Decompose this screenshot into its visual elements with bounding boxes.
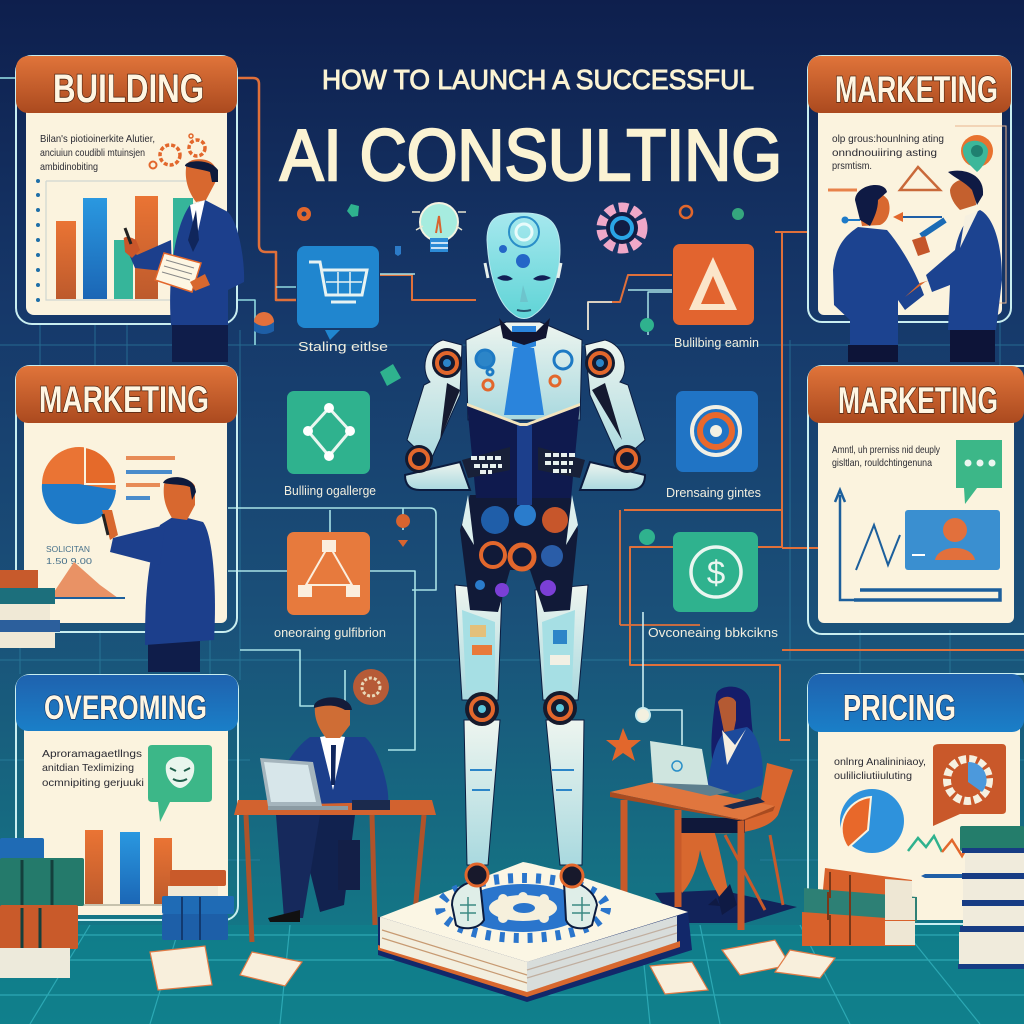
line chart — [835, 490, 1000, 600]
pie chart — [42, 447, 116, 524]
icon: gears — [150, 134, 205, 168]
panel paper — [24, 410, 227, 623]
panel paper — [818, 100, 1002, 315]
body text: Amntl, uh prerniss nid deuply — [832, 444, 941, 456]
robot head — [485, 213, 561, 318]
books: right small stack — [802, 868, 917, 946]
app tile: triangle — [673, 244, 759, 350]
robot hands — [462, 447, 585, 478]
body text: ambidinobiting — [40, 161, 98, 173]
panel: marketing right — [808, 366, 1024, 634]
connector lines — [0, 78, 1024, 750]
panel header — [16, 675, 238, 731]
triangle chart — [50, 562, 118, 598]
heading: PRICING — [843, 687, 956, 728]
panel: building — [16, 56, 237, 324]
panel: overcoming — [16, 675, 238, 920]
bar chart — [75, 830, 195, 905]
body text: gisltlan, rouldchtingenuna — [832, 457, 932, 469]
body text: prsmtism. — [832, 160, 872, 172]
body text: anitdian Texlimizing — [42, 762, 134, 774]
head — [186, 159, 217, 202]
laptop — [260, 758, 348, 810]
robot neck collar — [499, 318, 550, 345]
books: left bottom stack — [0, 838, 84, 978]
robot forearms and elbows — [405, 445, 645, 490]
title line 2: AI CONSULTING — [280, 116, 782, 196]
caption: Bulilbing eamin — [674, 336, 759, 350]
icon: speech bubble with gear — [933, 744, 1006, 826]
desk top — [234, 800, 436, 815]
icon — [297, 246, 379, 340]
person: man at laptop — [268, 697, 388, 922]
body text — [42, 748, 144, 789]
arrows — [828, 190, 942, 224]
body text: olp grous:hounlning ating — [832, 133, 944, 145]
head — [164, 479, 195, 520]
person left — [833, 185, 930, 362]
chair — [712, 763, 793, 833]
papers on floor right — [650, 940, 835, 994]
robot shoulders and upper arms — [407, 340, 645, 462]
body text: onndnouiiring asting — [832, 147, 937, 159]
icon — [287, 532, 370, 615]
books: right tall stack — [958, 826, 1024, 969]
book top — [380, 862, 688, 962]
triangle diagram — [900, 167, 940, 190]
small caption: SOLICITAN — [46, 545, 90, 554]
panel: marketing left — [16, 366, 237, 632]
books: small stack near left desk — [162, 870, 234, 940]
robot mechanical waist — [460, 495, 578, 612]
icon — [673, 244, 754, 325]
panel paper — [26, 100, 227, 315]
heading: MARKETING — [39, 379, 209, 420]
body text — [40, 133, 155, 173]
app tile: dollar — [648, 532, 778, 640]
legend lines — [126, 458, 175, 498]
axis dots — [36, 179, 40, 302]
panel header — [808, 56, 1011, 113]
app tile: network — [284, 391, 376, 498]
panel header — [16, 366, 237, 423]
desk top — [610, 782, 775, 820]
robot legs — [455, 585, 588, 865]
icon: light bulb — [412, 203, 466, 252]
heading: OVEROMING — [44, 689, 207, 727]
person: marketing presenter — [102, 477, 215, 672]
caption: Staling eitlse — [298, 340, 388, 354]
book cover edge — [378, 912, 692, 1002]
body text: oulilicliutiiuluting — [834, 770, 912, 782]
body text: onlnrg Analininiaoy, — [834, 756, 926, 768]
icon: gear — [602, 208, 642, 248]
icon: $ — [707, 554, 725, 591]
robot: central figure — [405, 213, 645, 865]
person: woman at laptop — [676, 687, 763, 915]
panel paper — [24, 720, 228, 915]
panel header — [808, 674, 1024, 732]
clipboard — [155, 253, 201, 292]
floor shadow — [655, 890, 797, 923]
desk: left — [234, 697, 436, 945]
panel: pricing — [808, 674, 1024, 924]
icon: teal badge — [961, 135, 993, 172]
small caption: 1.50 9.00 — [46, 557, 93, 566]
panel header — [16, 56, 237, 113]
icon: speech bubble — [956, 440, 1002, 504]
person right — [912, 171, 1002, 362]
panel header — [808, 366, 1024, 423]
panel paper — [818, 720, 1020, 920]
people: marketing discussion — [833, 171, 1002, 362]
wall grid lines — [0, 320, 1024, 860]
book pages — [380, 916, 677, 992]
platform emblem — [440, 878, 606, 938]
frame line — [955, 126, 1006, 303]
body text: Aproramagaetllngs — [42, 748, 142, 760]
robot feet — [452, 864, 597, 928]
robot book — [467, 403, 580, 505]
book: platform under robot — [378, 862, 692, 1002]
body text — [832, 133, 944, 172]
person: building presenter — [124, 159, 244, 362]
heading: BUILDING — [53, 67, 204, 111]
app tile: flow chart — [274, 532, 386, 640]
body text: anciuiun coudibli mtuinsjen — [40, 147, 145, 159]
icon — [287, 391, 370, 474]
app tile: target — [666, 391, 761, 500]
body text: ocmnipiting gerjuuki — [42, 777, 144, 789]
robot tie — [504, 326, 544, 415]
line chart — [908, 836, 972, 856]
body text — [834, 756, 926, 782]
arrow — [921, 874, 963, 878]
books: left middle stack — [0, 570, 60, 648]
desk: right — [610, 687, 797, 930]
panel paper — [818, 410, 1014, 623]
body text: Bilan's piotioinerkite Alutier, — [40, 133, 155, 145]
icon: speech bubble — [148, 745, 212, 822]
robot chest details — [476, 350, 572, 390]
caption: oneoraing gulfibrion — [274, 626, 386, 640]
title line 1: HOW TO LAUNCH A SUCCESSFUL — [322, 64, 754, 95]
legs — [676, 825, 730, 905]
icon — [676, 391, 758, 472]
caption: Ovconeaing bbkcikns — [648, 626, 778, 640]
profile card — [905, 510, 1000, 570]
desk items — [352, 800, 390, 810]
robot torso — [466, 322, 582, 420]
body text — [832, 444, 941, 469]
bar chart — [46, 181, 214, 300]
pie chart — [840, 789, 904, 853]
panel: marketing top right — [808, 56, 1011, 322]
caption: Bulliing ogallerge — [284, 484, 376, 498]
small decorative icons — [254, 204, 744, 761]
small caption — [46, 545, 93, 566]
floor grid — [0, 925, 1024, 1024]
papers on floor left — [150, 946, 302, 990]
caption: Drensaing gintes — [666, 486, 761, 500]
title — [280, 64, 782, 196]
app tile: cart — [297, 246, 388, 354]
laptop — [650, 741, 730, 796]
